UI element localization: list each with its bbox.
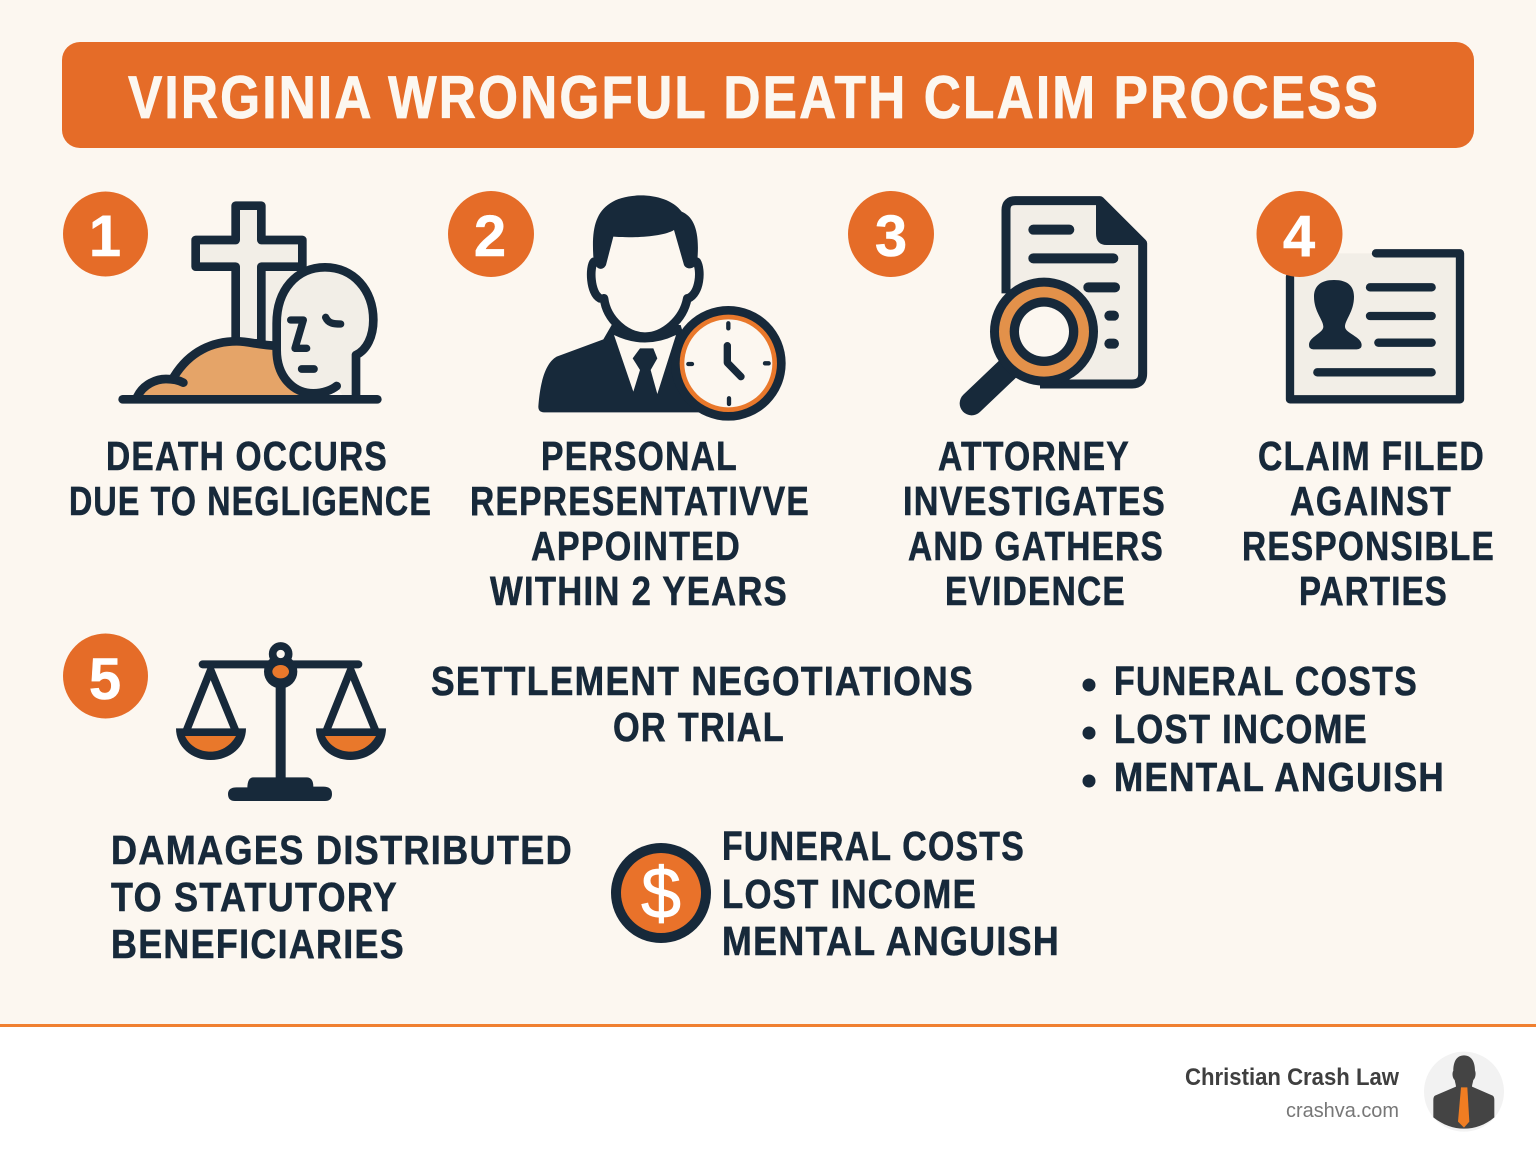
step 2 label: PERSONAL [541,433,738,479]
step 4 label: PARTIES [1299,568,1448,614]
step 5 label: settlement: OR TRIAL [613,704,785,750]
step 2 label [470,433,810,614]
step 2 label: WITHIN 2 YEARS [490,568,788,614]
step 5 label: settlement: SETTLEMENT NEGOTIATIONS [431,658,974,704]
step 2 number badge [448,191,534,277]
footer brand name and url: crashva.com [1286,1100,1399,1122]
damages distribution text: TO STATUTORY [111,874,398,920]
step 5 number badge: 5 [89,647,121,712]
icon: document and magnifying glass [972,201,1143,403]
step 2 label: REPRESENTATIVVE [470,478,810,524]
step 1 panel [63,192,432,524]
damages categories text [722,823,1060,964]
step 4 label: AGAINST [1290,478,1452,524]
step 3 panel [848,191,1166,614]
step 2 panel [448,191,810,614]
icon: dollar coin: $ [641,854,681,934]
step 5 label: settlement [431,658,974,750]
icon: representative with clock [538,195,786,421]
icon: scales of justice [176,646,386,801]
bulleted damages list [1082,658,1445,800]
bulleted damages list: FUNERAL COSTS [1114,658,1418,704]
step 3 number badge [848,191,934,277]
step 4 label: CLAIM FILED [1258,433,1485,479]
icon: attorney avatar [1424,1052,1504,1132]
title banner [62,42,1474,148]
bulleted damages list: LOST INCOME [1114,706,1368,752]
step 1 number badge: 1 [89,204,121,269]
step 4 label [1242,433,1495,614]
step 5 number badge [63,634,148,718]
step 2 label: APPOINTED [531,523,741,569]
icon: dollar coin [611,843,711,943]
step 1 label: DUE TO NEGLIGENCE [69,478,432,524]
step 5 panel [63,634,1445,801]
step 1 label [69,433,432,524]
step 2 number badge: 2 [474,204,506,269]
damages categories text: FUNERAL COSTS [722,823,1025,869]
step 4 number badge: 4 [1283,204,1315,269]
icon: grave cross and sleeping face [123,206,377,399]
bulleted damages list: MENTAL ANGUISH [1114,754,1445,800]
footer [0,1024,1536,1154]
damages categories text: LOST INCOME [722,871,977,917]
damages distribution text: BENEFICIARIES [111,921,405,967]
step 3 label: AND GATHERS [908,523,1164,569]
damages distribution text [111,827,573,967]
damages categories text: MENTAL ANGUISH [722,918,1060,964]
step 4 panel [1242,191,1495,614]
damages distribution text: DAMAGES DISTRIBUTED [111,827,573,873]
step 3 label: INVESTIGATES [903,478,1166,524]
step 3 label [903,433,1166,614]
icon: claim document [1290,253,1460,399]
step 3 label: EVIDENCE [945,568,1126,614]
step 3 label: ATTORNEY [938,433,1130,479]
step 4 number badge [1256,191,1342,277]
footer brand name and url: Christian Crash Law [1185,1064,1399,1091]
step 1 label: DEATH OCCURS [106,433,388,479]
step 1 number badge [63,192,148,276]
footer brand name and url [1185,1064,1399,1122]
step 3 number badge: 3 [875,204,907,269]
